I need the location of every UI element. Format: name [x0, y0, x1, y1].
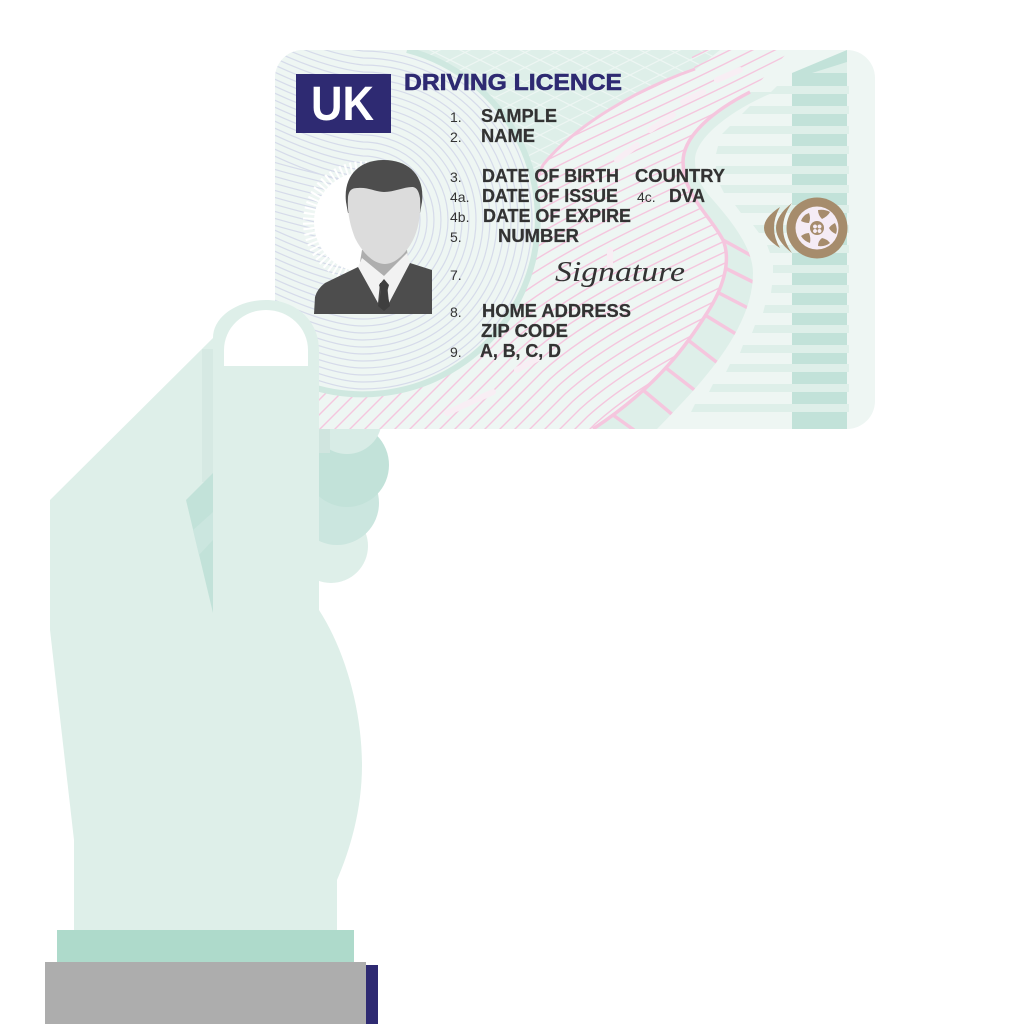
fingers behind the card [294, 384, 389, 583]
UK badge: UK [311, 78, 374, 131]
thumbnail [224, 310, 308, 366]
shirt cuff [57, 930, 354, 962]
licence field numbers: 4a. [450, 189, 469, 205]
portrait photo [314, 160, 432, 314]
licence field numbers: 4c. [637, 189, 656, 205]
sleeve edge [366, 965, 378, 1024]
licence field numbers: 1. [450, 109, 462, 125]
white photo glow [303, 161, 368, 277]
licence field values: SAMPLE [481, 106, 557, 126]
licence field numbers [450, 109, 656, 360]
panel: mint lattice zone [418, 50, 720, 173]
licence field values: DATE OF ISSUE [482, 186, 618, 206]
licence field values: NUMBER [498, 226, 579, 246]
licence field numbers: 2. [450, 129, 462, 145]
green arc around rings [319, 50, 541, 398]
right security column with stripes [691, 50, 849, 429]
licence field values: HOME ADDRESS [482, 301, 631, 321]
licence field numbers: 9. [450, 344, 462, 360]
licence field values: ZIP CODE [481, 321, 568, 341]
licence field values [480, 106, 725, 361]
licence field numbers: 5. [450, 229, 462, 245]
licence field numbers: 4b. [450, 209, 469, 225]
licence field values: DATE OF EXPIRE [483, 206, 631, 226]
driving licence card [275, 50, 875, 429]
hand with thumb [50, 300, 362, 930]
jacket sleeve [45, 962, 366, 1024]
UK badge [296, 74, 391, 133]
licence field numbers: 7. [450, 267, 462, 283]
pink hatched security pattern [319, 50, 784, 429]
licence field numbers: 3. [450, 169, 462, 185]
licence field numbers: 8. [450, 304, 462, 320]
concentric guilloche rings [275, 50, 535, 392]
icon: hologram wheel [764, 198, 848, 258]
licence field values: NAME [481, 126, 535, 146]
licence field values: A, B, C, D [480, 341, 561, 361]
heading: driving licence: DRIVING LICENCE [404, 69, 622, 95]
licence field values: DATE OF BIRTH [482, 166, 619, 186]
licence field values: COUNTRY [635, 166, 725, 186]
mint band beside the pink curve [530, 69, 775, 430]
licence field values: DVA [669, 186, 705, 206]
signature: Signature [555, 257, 685, 288]
